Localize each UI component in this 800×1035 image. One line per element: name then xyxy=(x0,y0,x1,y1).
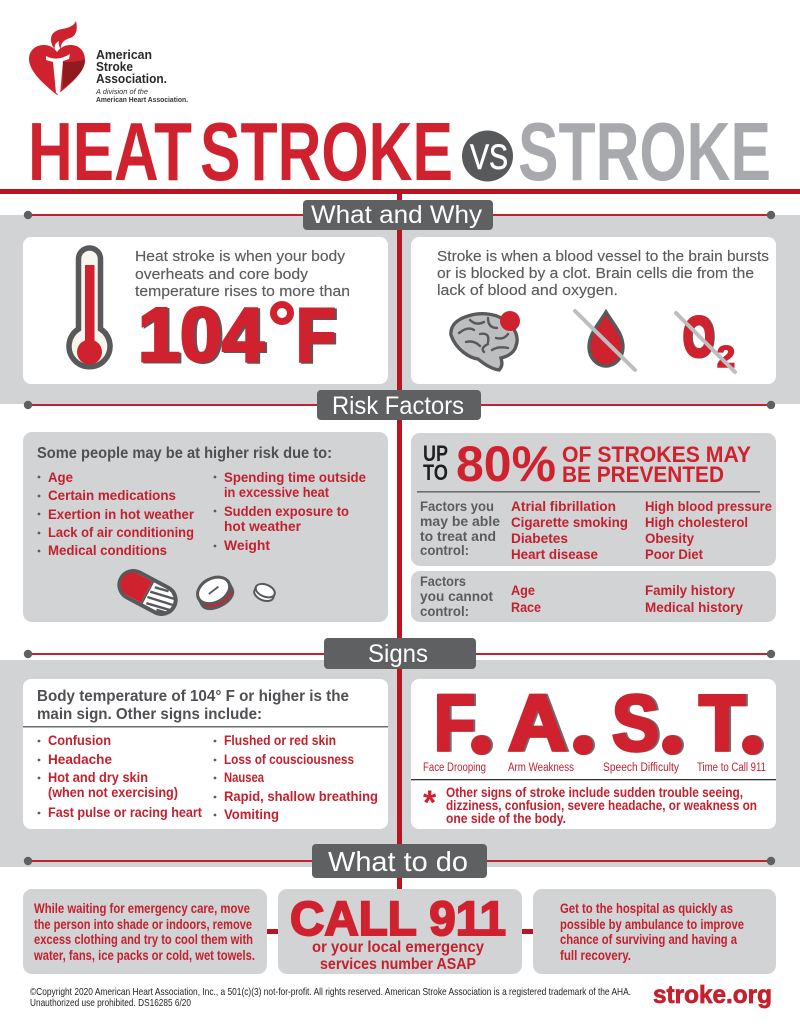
uncontrollable list xyxy=(511,582,743,615)
FAST letters: S xyxy=(614,678,661,767)
heading: Risk Factors: Risk Factors xyxy=(332,392,464,420)
signs list left xyxy=(38,732,202,820)
up to 80% headline: BE PREVENTED xyxy=(562,462,724,487)
section rule: What to do xyxy=(24,857,775,865)
heading: What to do: What to do xyxy=(328,846,468,877)
other stroke signs: one side of the body. xyxy=(446,811,566,826)
heat stroke text: overheats and core body xyxy=(135,267,309,283)
uncontrollable label: Factors xyxy=(420,573,466,589)
signs list left: (when not exercising) xyxy=(48,784,178,800)
FAST letters: S xyxy=(612,678,659,767)
icon: round tablet xyxy=(193,572,237,613)
panel: get to hospital: chance of surviving and having a xyxy=(560,932,737,947)
signs list right: Flushed or red skin xyxy=(224,732,336,748)
panel: uncontrollable factors xyxy=(411,571,776,622)
panel: stroke definition xyxy=(411,237,776,384)
uncontrollable list: Age xyxy=(511,582,535,598)
panel: call 911: services number ASAP xyxy=(320,956,476,973)
risk list left: Age xyxy=(48,469,73,485)
104°F: 104 xyxy=(138,293,264,378)
panel: F.A.S.T. xyxy=(411,678,776,829)
copyright xyxy=(30,987,631,1009)
icon: no oxygen: O xyxy=(683,305,714,368)
treatable factors label: may be able xyxy=(420,513,500,529)
uncontrollable label: control: xyxy=(420,603,469,619)
panel: What and Why background xyxy=(0,215,800,404)
panel: get to hospital: Get to the hospital as quickly as xyxy=(560,901,733,916)
logo: American Stroke Association xyxy=(29,21,188,104)
signs list left: Headache xyxy=(48,751,112,767)
panel: heat stroke definition xyxy=(23,237,388,384)
stroke text: lack of blood and oxygen. xyxy=(437,283,618,299)
risk list left: Medical conditions xyxy=(48,542,167,558)
treatable factors list: High cholesterol xyxy=(645,514,748,530)
logo wordmark: Stroke xyxy=(96,60,133,74)
icon: no oxygen xyxy=(676,305,735,374)
panel: who is at risk of heat stroke xyxy=(23,432,388,622)
panel: while waiting: While waiting for emergency care, move xyxy=(34,901,250,916)
signs list right: Nausea xyxy=(224,769,264,785)
signs list left: Fast pulse or racing heart xyxy=(48,804,202,820)
risk list right: hot weather xyxy=(224,518,302,534)
treatable factors label: to treat and xyxy=(420,528,496,544)
icon: brain with clot xyxy=(451,311,520,370)
up to 80% headline: UP xyxy=(423,441,448,466)
risk list right xyxy=(214,469,366,553)
treatable factors label xyxy=(420,498,500,558)
panel: while waiting: water, fans, ice packs or cold, wet towels. xyxy=(33,948,255,963)
logo wordmark: American Heart Association. xyxy=(96,97,188,104)
uncontrollable list: Race xyxy=(511,599,541,615)
treatable factors list: Diabetes xyxy=(511,530,568,546)
up to 80% headline: OF STROKES MAY xyxy=(562,442,751,467)
up to 80% headline: 80% xyxy=(456,436,556,492)
signs heading xyxy=(37,688,349,723)
risk list left: Exertion in hot weather xyxy=(48,506,195,522)
other stroke signs: Other signs of stroke include sudden trouble seeing, xyxy=(446,785,743,800)
icon: no blood xyxy=(575,311,635,370)
104°F xyxy=(138,293,338,379)
vs badge: VS xyxy=(470,138,508,177)
heading: Signs xyxy=(324,638,476,669)
icon: thermometer xyxy=(69,248,110,367)
stroke text xyxy=(437,249,769,299)
up to 80% headline xyxy=(423,436,751,492)
icon: heart and torch xyxy=(29,21,85,95)
signs list right: Rapid, shallow breathing xyxy=(224,788,378,804)
FAST letters: T xyxy=(699,678,745,767)
FAST letters: A xyxy=(508,678,567,767)
treatable factors label: control: xyxy=(420,542,469,558)
treatable factors list: Heart disease xyxy=(511,546,598,562)
icon: small tablet xyxy=(252,581,277,604)
panel: call 911: CALL 911 xyxy=(290,893,506,946)
icon: no oxygen: 2 xyxy=(717,339,735,374)
heat stroke text: temperature rises to more than xyxy=(135,284,350,300)
FAST letters: F xyxy=(434,678,475,767)
risk list left xyxy=(38,469,195,558)
FAST labels: Time to Call 911 xyxy=(697,762,766,774)
section rule: Risk Factors xyxy=(24,401,775,409)
uncontrollable label: you cannot xyxy=(420,588,493,604)
104°F: 104 xyxy=(140,294,266,379)
title xyxy=(28,105,771,198)
risk list left: Certain medications xyxy=(48,487,176,503)
FAST labels: Face Drooping xyxy=(423,762,486,774)
treatable factors list xyxy=(511,498,772,562)
stroke text: or is blocked by a clot. Brain cells die from the xyxy=(437,266,754,282)
signs list right: Vomiting xyxy=(224,806,279,822)
104°F: F xyxy=(296,293,336,378)
risk heading: Some people may be at higher risk due to: xyxy=(37,445,332,462)
logo wordmark xyxy=(95,48,188,104)
heat stroke text: Heat stroke is when your body xyxy=(135,249,346,265)
heat stroke text xyxy=(135,249,350,300)
panel: preventable strokes xyxy=(411,433,776,566)
FAST labels: Speech Difficulty xyxy=(603,762,679,774)
FAST letters: T xyxy=(701,678,747,767)
risk list right: in excessive heat xyxy=(224,484,329,500)
signs heading: Body temperature of 104° F or higher is the xyxy=(37,688,349,705)
uncontrollable list: Family history xyxy=(645,582,735,598)
FAST letters: F xyxy=(436,678,477,767)
copyright: ©Copyright 2020 American Heart Association, Inc., a 501(c)(3) not-for-profit. All rights reserved. American Stroke Association is a registered trademark of the AHA. xyxy=(30,987,631,998)
treatable factors list: Poor Diet xyxy=(645,546,703,562)
stroke text: Stroke is when a blood vessel to the brain bursts xyxy=(437,249,769,265)
title: STROKE xyxy=(200,105,453,198)
FAST letters: A xyxy=(510,678,569,767)
treatable factors list: Obesity xyxy=(645,530,694,546)
vs badge xyxy=(462,130,513,182)
risk list left: Lack of air conditioning xyxy=(48,524,194,540)
panel: call 911 xyxy=(278,889,522,974)
risk list right: Sudden exposure to xyxy=(224,503,349,519)
panel: call 911: or your local emergency xyxy=(312,939,484,956)
heading: Signs: Signs xyxy=(368,640,428,668)
logo wordmark: Association. xyxy=(96,72,167,86)
panel: get to hospital: possible by ambulance to improve xyxy=(560,917,744,932)
signs list right: Loss of cousciousness xyxy=(224,751,354,767)
heading: What and Why: What and Why xyxy=(311,201,483,229)
copyright: Unauthorized use prohibited. DS16285 6/20 xyxy=(30,998,191,1009)
panel: while waiting: excess clothing and try to cool them with xyxy=(34,932,253,947)
signs list left: Hot and dry skin xyxy=(48,769,148,785)
treatable factors list: Cigarette smoking xyxy=(511,514,628,530)
stroke.org url: stroke.org xyxy=(653,981,772,1009)
logo wordmark: A division of the xyxy=(95,89,148,96)
section rule: What and Why xyxy=(24,211,775,219)
signs heading: main sign. Other signs include: xyxy=(37,706,262,723)
other stroke signs: dizziness, confusion, severe headache, or weakness on xyxy=(446,798,757,813)
104°F: F xyxy=(298,294,338,379)
panel: while waiting xyxy=(23,889,267,974)
panel: get to hospital: full recovery. xyxy=(560,948,631,963)
panel: while waiting: the person into shade or indoors, remove xyxy=(34,917,252,932)
signs list right xyxy=(214,732,378,822)
treatable factors list: High blood pressure xyxy=(645,498,772,514)
FAST labels: Arm Weakness xyxy=(508,762,574,774)
uncontrollable label xyxy=(420,573,493,619)
icon: no oxygen: O xyxy=(684,305,715,368)
signs list left: Confusion xyxy=(48,732,111,748)
logo wordmark: American xyxy=(96,48,152,62)
panel: heat stroke signs xyxy=(23,679,388,829)
treatable factors label: Factors you xyxy=(420,498,494,514)
panel: get to hospital xyxy=(533,889,776,974)
FAST labels xyxy=(423,762,766,774)
other stroke signs xyxy=(446,785,757,826)
title: HEAT xyxy=(28,105,192,198)
uncontrollable list: Medical history xyxy=(645,599,743,615)
section rule: Signs xyxy=(24,650,775,658)
risk list right: Spending time outside xyxy=(224,469,366,485)
panel: Signs background xyxy=(0,660,800,867)
icon: asterisk: * xyxy=(423,784,437,822)
up to 80% headline: TO xyxy=(423,460,448,485)
treatable factors list: Atrial fibrillation xyxy=(511,498,616,514)
connectors xyxy=(267,929,533,934)
icon: capsule xyxy=(114,566,181,619)
FAST letters xyxy=(434,678,764,767)
risk list right: Weight xyxy=(224,537,270,553)
